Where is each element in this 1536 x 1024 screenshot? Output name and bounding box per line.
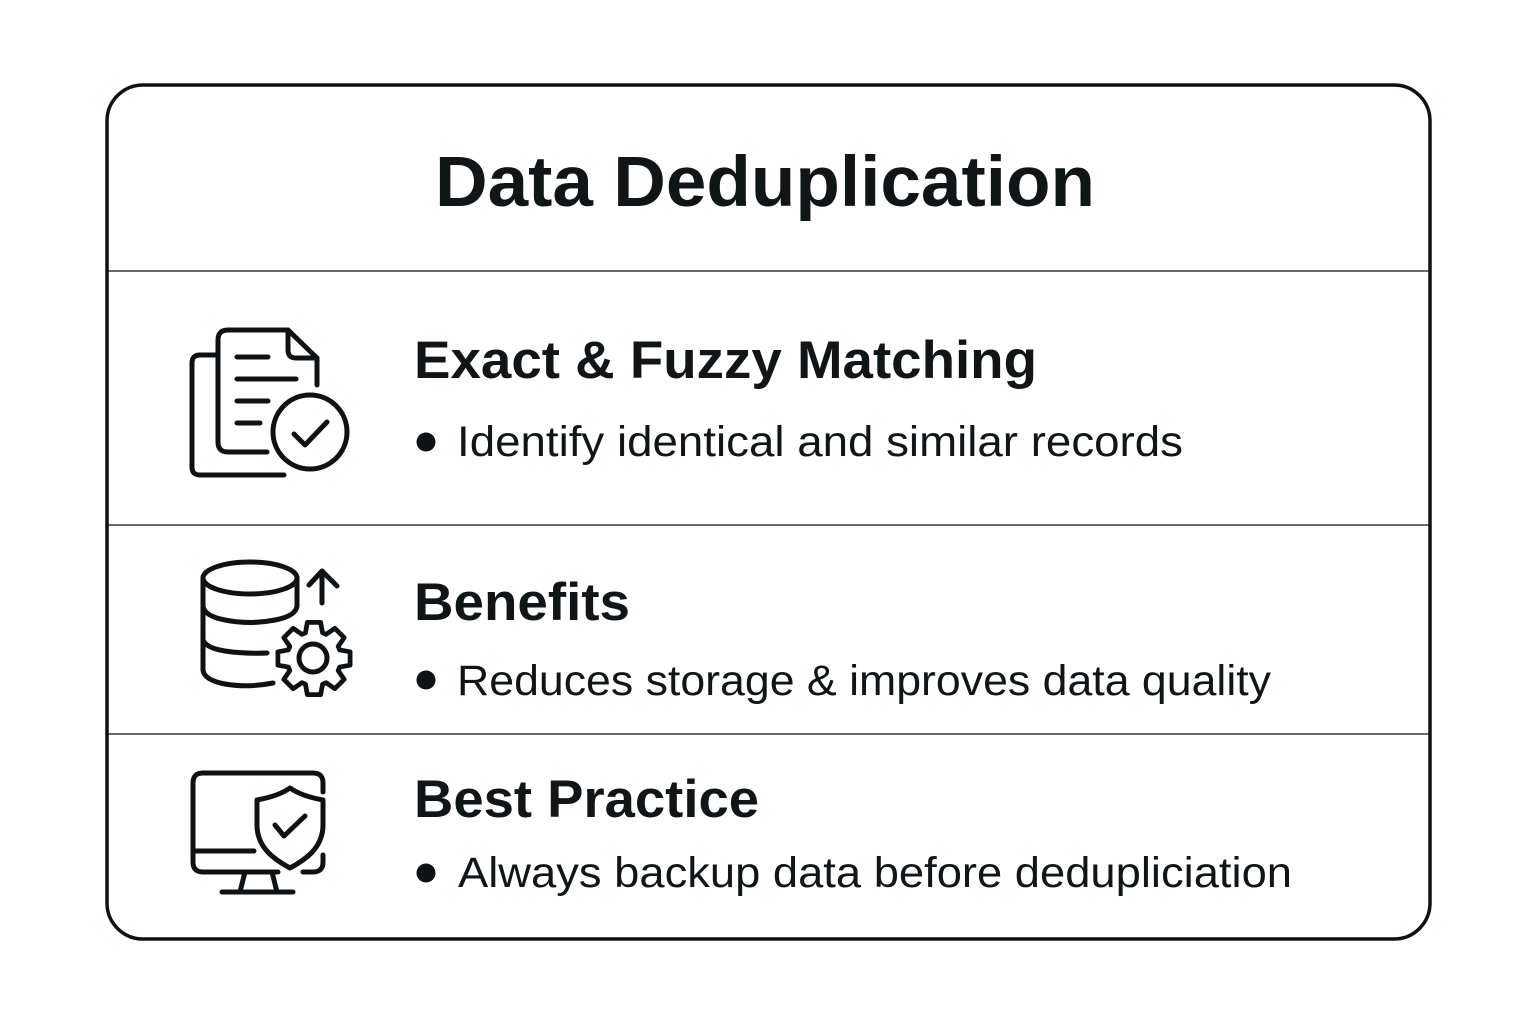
panel: exact and fuzzy matching xyxy=(192,330,1183,475)
bullet: reduces storage: Reduces storage & improves data quality xyxy=(457,657,1272,705)
bullet: identify records: Identify identical and similar records xyxy=(457,418,1183,466)
heading: benefits: Benefits xyxy=(414,573,630,632)
panel: benefits xyxy=(203,562,1272,705)
icon: documents with check xyxy=(192,330,347,475)
card frame xyxy=(107,85,1430,939)
icon: monitor with shield xyxy=(193,773,323,892)
bullet: backup data: Always backup data before dedupliciation xyxy=(458,849,1292,897)
panel: best practice xyxy=(193,770,1292,897)
title: Data Deduplication xyxy=(435,143,1095,222)
icon: database with gear and arrow xyxy=(203,562,350,695)
heading: exact and fuzzy matching: Exact & Fuzzy Matching xyxy=(414,331,1037,390)
heading: best practice: Best Practice xyxy=(414,770,759,829)
